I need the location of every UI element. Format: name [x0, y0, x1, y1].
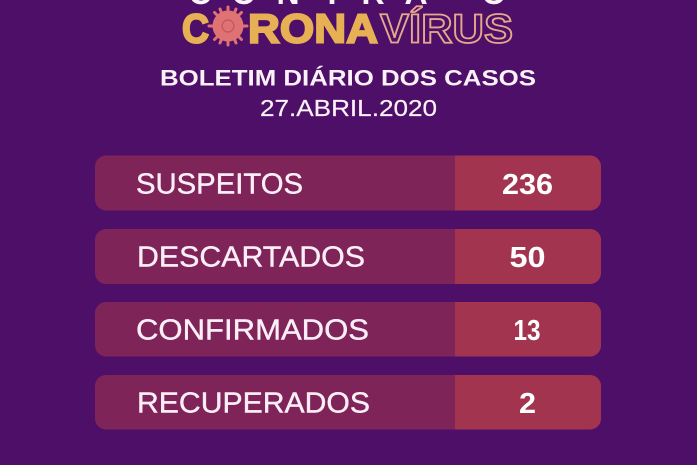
bulletin date: 27.ABRIL.2020 — [260, 95, 437, 121]
row: recuperados — [95, 375, 601, 430]
row: suspeitos: 236 — [502, 169, 553, 201]
row: descartados: 50 — [510, 242, 546, 274]
logo letter C: C — [182, 6, 209, 52]
header: campaign logo — [182, 0, 513, 52]
bulletin title: BOLETIM DIÁRIO DOS CASOS — [160, 66, 536, 90]
row: suspeitos: SUSPEITOS — [136, 168, 303, 200]
row: descartados — [95, 229, 601, 284]
cropped heading: contra o — [188, 0, 506, 11]
row: confirmados: 13 — [514, 315, 540, 347]
row: suspeitos — [95, 156, 601, 210]
row: descartados: DESCARTADOS — [137, 242, 365, 274]
icon: coronavirus — [209, 7, 247, 45]
row: recuperados: RECUPERADOS — [137, 388, 370, 420]
row: confirmados: CONFIRMADOS — [136, 314, 369, 346]
logo word: vírus outlined: VÍRUS — [380, 6, 513, 52]
logo word: rona: RONA — [248, 6, 378, 52]
row: confirmados — [95, 302, 601, 356]
row: recuperados: 2 — [519, 388, 536, 420]
